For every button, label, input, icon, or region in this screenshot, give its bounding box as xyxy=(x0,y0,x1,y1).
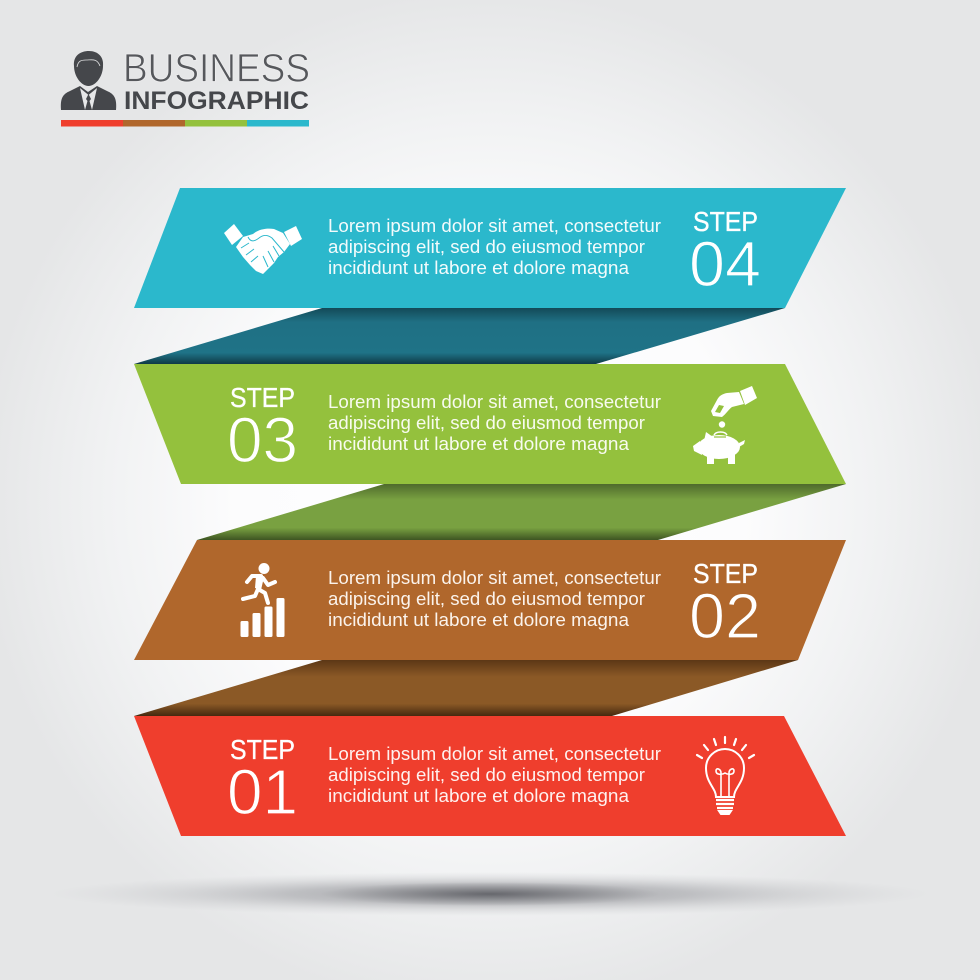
header: business infographic logo xyxy=(61,46,310,126)
step label 04: STEP xyxy=(693,206,758,237)
fold: green xyxy=(197,484,846,540)
icon: handshake xyxy=(224,224,302,274)
panel: step 01 xyxy=(134,716,846,836)
step label 02: 02 xyxy=(689,580,761,652)
text block: adipiscing elit, sed do eiusmod tempor xyxy=(328,765,645,785)
fold: brown xyxy=(134,660,798,716)
text block: incididunt ut labore et dolore magna xyxy=(328,786,630,806)
heading: INFOGRAPHIC: INFOGRAPHIC xyxy=(124,87,309,115)
text block: incididunt ut labore et dolore magna xyxy=(328,610,630,630)
colour bar xyxy=(61,120,309,126)
text block xyxy=(328,216,661,278)
panel: step 02 xyxy=(134,540,846,660)
text block: Lorem ipsum dolor sit amet, consectetur xyxy=(328,392,661,412)
step label 01: STEP xyxy=(230,734,295,765)
icon: businessman xyxy=(61,51,116,110)
text block: Lorem ipsum dolor sit amet, consectetur xyxy=(328,744,661,764)
step label 01: 01 xyxy=(227,756,298,828)
text block: incididunt ut labore et dolore magna xyxy=(328,434,630,454)
text block: Lorem ipsum dolor sit amet, consectetur xyxy=(328,568,661,588)
step label 03: 03 xyxy=(227,404,298,476)
icon: runner on bars xyxy=(240,563,284,637)
text block xyxy=(328,392,661,454)
panel: step 03 xyxy=(134,364,846,484)
text block: adipiscing elit, sed do eiusmod tempor xyxy=(328,413,645,433)
text block: Lorem ipsum dolor sit amet, consectetur xyxy=(328,216,661,236)
floor shadow xyxy=(50,872,930,916)
icon: hand and piggy bank xyxy=(693,386,757,464)
step label 04: 04 xyxy=(689,228,761,300)
fold: teal xyxy=(134,308,785,364)
text block xyxy=(328,568,661,630)
heading: BUSINESS: BUSINESS xyxy=(123,46,310,90)
text block: incididunt ut labore et dolore magna xyxy=(328,258,630,278)
step label 03: STEP xyxy=(230,382,295,413)
panel: step 04 xyxy=(134,188,846,308)
step label 02: STEP xyxy=(693,558,758,589)
text block xyxy=(328,744,661,806)
text block: adipiscing elit, sed do eiusmod tempor xyxy=(328,237,645,257)
icon: light bulb xyxy=(697,737,754,814)
text block: adipiscing elit, sed do eiusmod tempor xyxy=(328,589,645,609)
